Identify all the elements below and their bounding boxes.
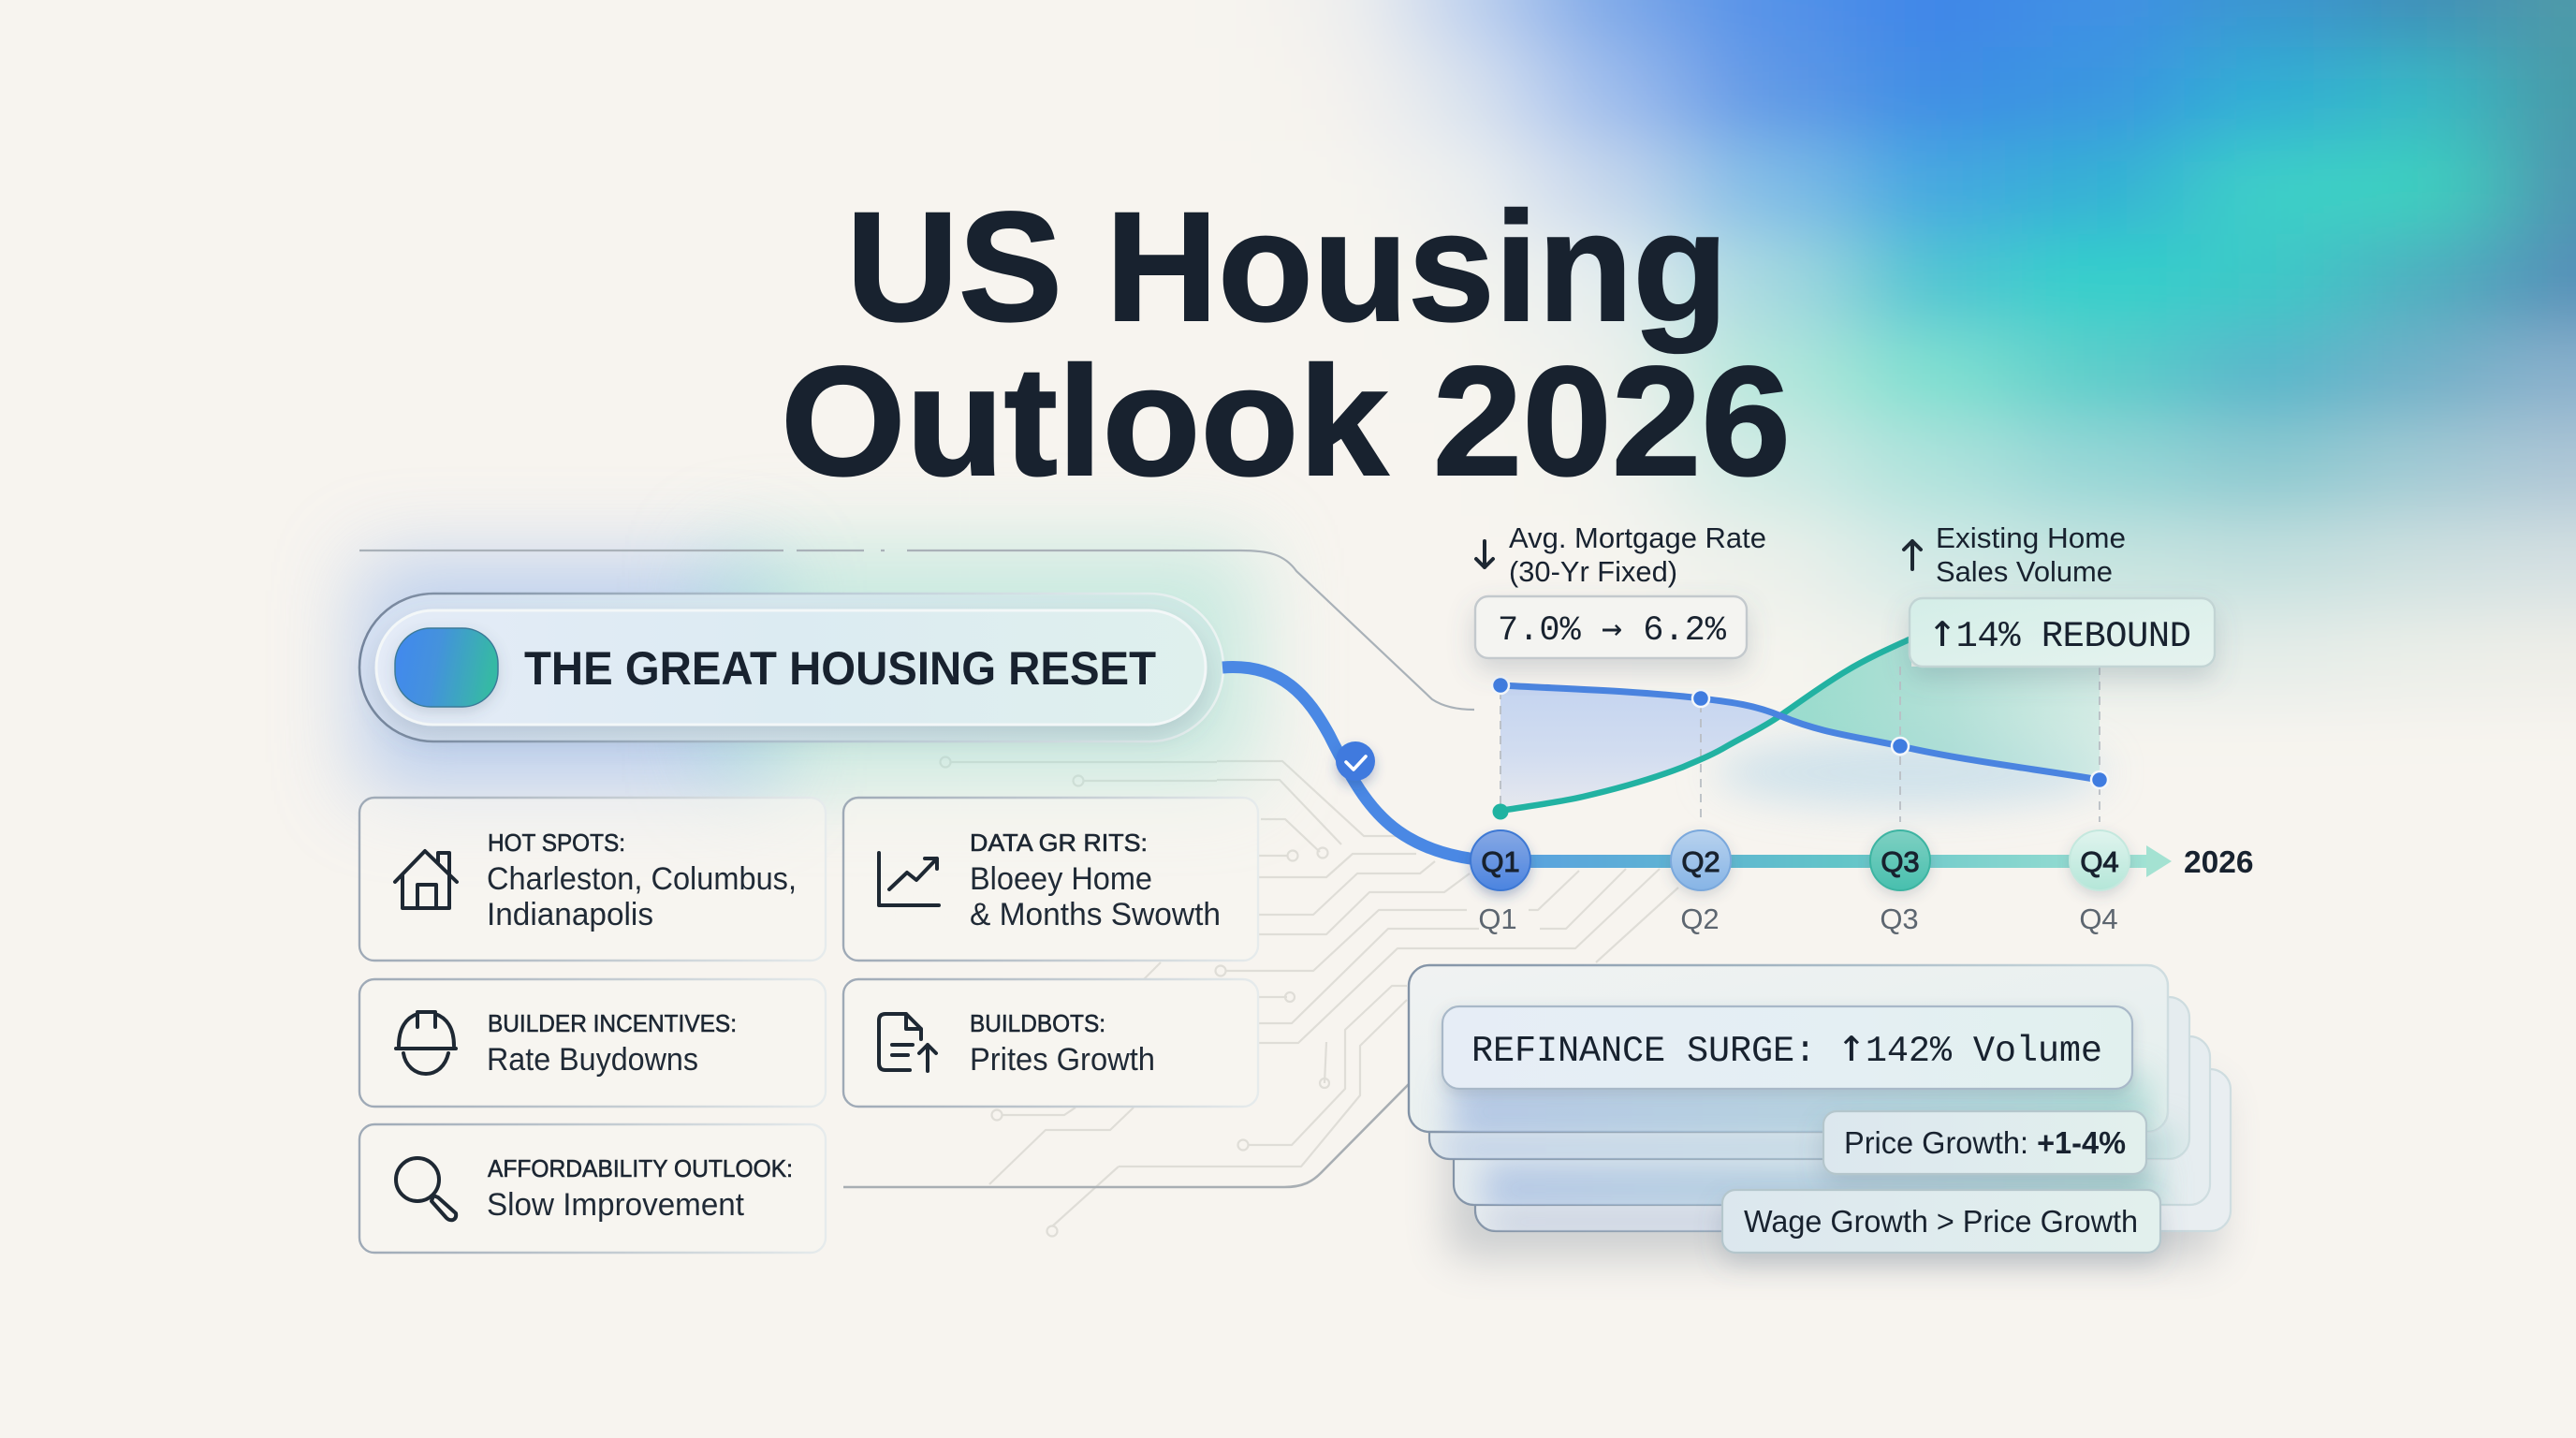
card: builder incentives: Rate Buydowns (487, 1042, 698, 1078)
stack sheet 1 (1409, 965, 2168, 1147)
quarter labels: Q2 (1680, 902, 1720, 935)
card: buildbots (843, 979, 1258, 1107)
callout: rate change (1475, 596, 1747, 658)
card: builder incentives: BUILDER INCENTIVES: (488, 1009, 737, 1037)
card: hot spots: Charleston, Columbus, (487, 861, 797, 897)
icon: checkmark badge (1336, 741, 1375, 781)
node Q4 (2070, 830, 2130, 890)
rate data points (1492, 677, 2108, 788)
card: hot spots (359, 798, 826, 961)
label: existing home sales volume: Existing Home (1936, 521, 2126, 554)
soft tint below the lines (1713, 737, 2106, 808)
callout: price growth (1823, 1111, 2146, 1174)
callout: refinance surge: REFINANCE SURGE: ↑142% Volume (1471, 1018, 2102, 1072)
node Q4: Q4 (2080, 845, 2119, 878)
callout: wage growth: Wage Growth > Price Growth (1744, 1204, 2138, 1239)
glow behind pill (360, 548, 1254, 791)
icon: line chart (879, 853, 939, 905)
card: data growth: DATA GR RITS: (970, 829, 1148, 857)
card: affordability outlook: AFFORDABILITY OUTLOOK: (488, 1154, 793, 1182)
node Q1: Q1 (1481, 845, 1520, 878)
callout: wage growth (1722, 1190, 2160, 1253)
icon: gradient toggle (395, 628, 498, 707)
label: avg mortgage rate: Avg. Mortgage Rate (1509, 521, 1766, 554)
heading: the great housing reset: THE GREAT HOUSING RESET (524, 642, 1156, 695)
node Q1 (1471, 830, 1530, 890)
quarter labels: Q4 (2079, 902, 2118, 935)
line: mortgage rate (1500, 685, 2100, 780)
card: data growth: Bloeey Home (970, 861, 1152, 897)
stack sheet 2 (1429, 997, 2189, 1170)
quarter labels (1478, 902, 2118, 935)
label: existing home sales volume (1904, 521, 2126, 588)
node Q2: Q2 (1681, 845, 1720, 878)
stack sheet 4 (1475, 1069, 2231, 1240)
callout: refinance surge (1442, 1006, 2132, 1089)
callout: sales rebound (1910, 598, 2215, 667)
label: avg mortgage rate: (30-Yr Fixed) (1509, 555, 1677, 588)
panel: refinance stack (1409, 965, 2231, 1259)
icon: hard hat (396, 1012, 456, 1074)
icon: magnifier (396, 1158, 456, 1220)
title (781, 181, 1791, 508)
line: sales volume (1500, 638, 1911, 811)
dashed quarter guides (1500, 667, 2100, 822)
quarter labels: Q1 (1478, 902, 1517, 935)
callout: sales rebound: ↑14% REBOUND (1928, 603, 2191, 657)
title: Outlook 2026 (781, 335, 1791, 508)
arrow head (2146, 845, 2172, 877)
stack shadow (1446, 1086, 2218, 1259)
icon: document with arrow (879, 1014, 936, 1071)
quarter labels: Q3 (1880, 902, 1919, 935)
node Q2 (1671, 830, 1731, 890)
area under sales volume (1779, 638, 2100, 780)
frame line: bottom (843, 1084, 1409, 1187)
icon: house (395, 851, 457, 908)
panel: The Great Housing Reset pill (359, 594, 1223, 741)
main curve from pill to Q1 (1222, 668, 1502, 861)
stack sheet 3 (1454, 1036, 2210, 1217)
card: data growth (843, 798, 1258, 961)
card: data growth: & Months Swowth (970, 897, 1221, 932)
area under mortgage rate (1500, 685, 1781, 811)
card: affordability outlook (359, 1124, 826, 1253)
label: existing home sales volume: Sales Volume (1936, 555, 2113, 588)
card: hot spots: HOT SPOTS: (488, 829, 625, 857)
node Q3 (1870, 830, 1930, 890)
card: hot spots: Indianapolis (487, 897, 653, 932)
sales start point (1492, 803, 1509, 820)
frame line: top (359, 550, 1474, 710)
card: builder incentives (359, 979, 826, 1107)
card: buildbots: BUILDBOTS: (970, 1009, 1105, 1037)
callout: price growth: Price Growth: +1-4% (1844, 1125, 2126, 1160)
card: buildbots: Prites Growth (970, 1042, 1155, 1078)
node Q3: Q3 (1881, 845, 1920, 878)
axis end label: 2026 (2184, 845, 2254, 880)
chart: mortgage rate and sales volume (1492, 638, 2108, 822)
title: US Housing (846, 181, 1728, 354)
background circuit traces (940, 756, 1678, 1236)
timeline axis (1471, 830, 2254, 935)
callout: rate change: 7.0% → 6.2% (1498, 608, 1727, 651)
card: affordability outlook: Slow Improvement (487, 1187, 745, 1223)
label: avg mortgage rate (1476, 521, 1766, 588)
